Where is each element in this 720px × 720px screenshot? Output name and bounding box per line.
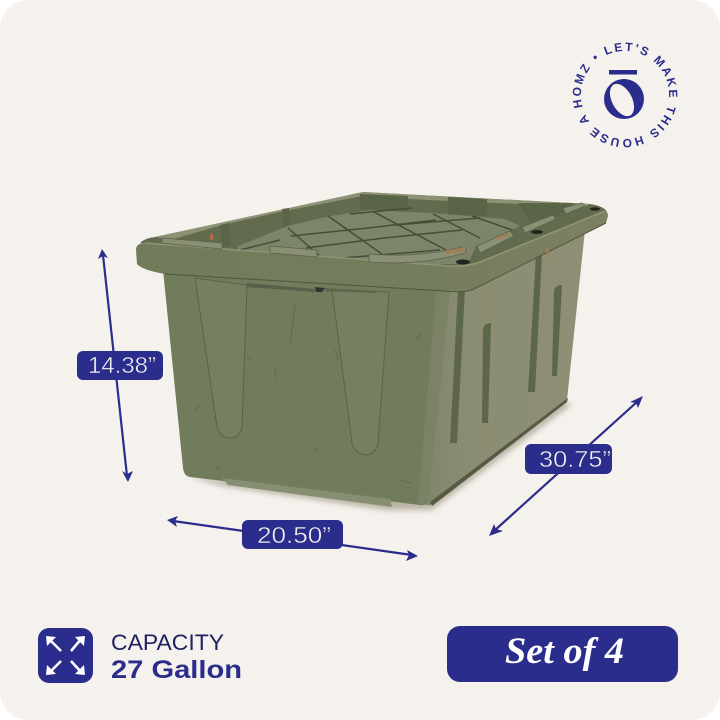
capacity block <box>38 628 242 684</box>
right taper recess <box>332 290 389 455</box>
capacity label: CAPACITY <box>111 630 224 655</box>
tote front face <box>163 270 450 507</box>
depth label: 30.75” <box>539 446 611 472</box>
height label: 14.38” <box>88 352 156 378</box>
brand seal <box>572 42 678 148</box>
rim screw holes <box>456 207 600 264</box>
bottom lip <box>222 478 392 507</box>
ground shadow <box>186 402 572 510</box>
width label <box>242 520 343 549</box>
width arrow <box>167 516 418 561</box>
set of 4 badge <box>447 626 678 682</box>
product photo: green storage tote <box>136 192 608 510</box>
rim front band <box>136 211 608 292</box>
icon: expand arrows <box>38 628 93 683</box>
height label <box>77 351 163 380</box>
lid grid lines <box>240 208 512 258</box>
tote side face <box>428 230 585 506</box>
lid grid panels <box>238 210 520 264</box>
rust marks <box>210 232 549 258</box>
lid recess and back wall <box>140 192 607 268</box>
side ribs <box>450 252 562 443</box>
left taper recess <box>195 278 247 438</box>
depth arrow <box>489 396 643 536</box>
top clip bars <box>247 283 315 292</box>
handles on rim <box>162 203 585 263</box>
height arrow <box>98 249 133 482</box>
depth label <box>525 444 612 474</box>
set of 4 badge: Set of 4 <box>505 631 624 672</box>
capacity value: 27 Gallon <box>111 656 242 684</box>
logo bar <box>609 70 637 74</box>
scratches <box>195 305 422 483</box>
height dimension <box>77 249 163 482</box>
back wall tabs <box>220 194 575 247</box>
logo ring <box>604 79 644 120</box>
width dimension <box>167 516 418 561</box>
depth dimension <box>489 396 643 536</box>
width label: 20.50” <box>257 522 331 548</box>
circular tagline: • LET'S MAKE THIS HOUSE A HOMZ <box>572 42 678 148</box>
